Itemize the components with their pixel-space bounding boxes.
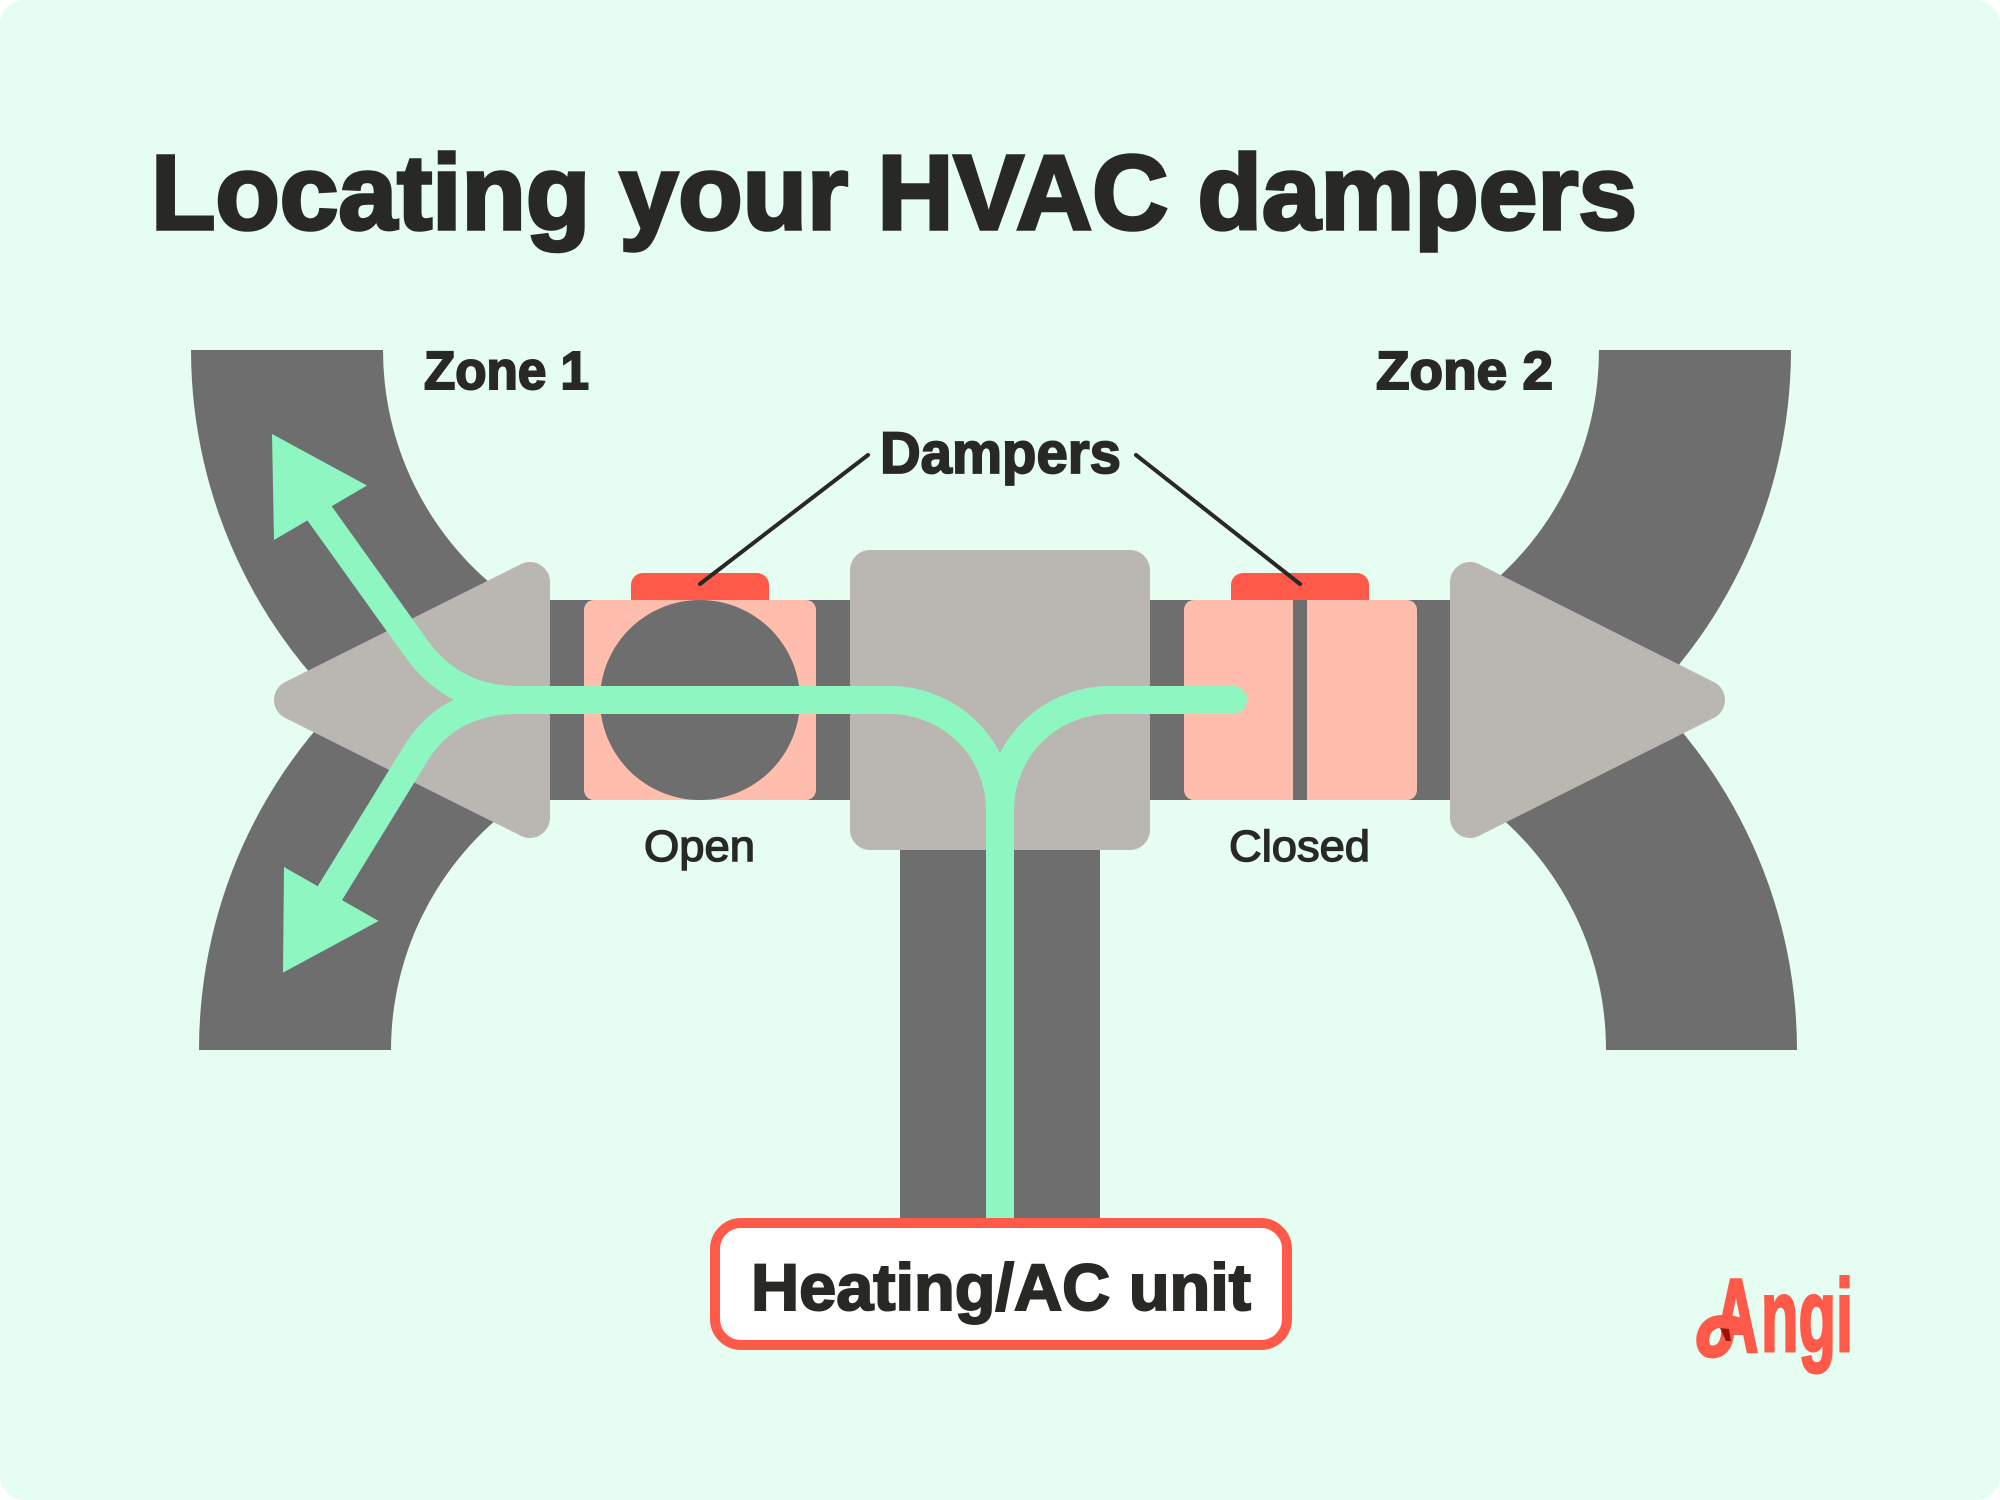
Angi logo <box>1696 1275 1850 1374</box>
duct: zone 1 upper branch <box>191 350 501 743</box>
damper body: open <box>584 600 816 800</box>
logo letters ngi: ngi <box>1761 1258 1853 1373</box>
junction: left splitter <box>294 582 530 818</box>
closed label: Closed <box>1229 822 1370 871</box>
damper handle: closed <box>1231 573 1369 600</box>
zone 2 label: Zone 2 <box>1376 341 1553 401</box>
damper blade: open <box>600 600 800 800</box>
unit label: Heating/AC unit <box>751 1250 1251 1324</box>
dampers label: Dampers <box>880 421 1121 486</box>
airflow: upper stem <box>310 500 518 700</box>
heating and AC unit box <box>715 1223 1287 1345</box>
closed damper <box>1184 573 1417 800</box>
damper handle: open <box>631 573 769 600</box>
open damper <box>584 573 816 800</box>
arrowhead: lower <box>283 867 379 973</box>
duct: horizontal main <box>540 600 1460 800</box>
damper body: closed <box>1184 600 1417 800</box>
airflow: supply to left branch <box>518 700 1000 1225</box>
airflow arrows <box>272 434 1233 1225</box>
unit box outline <box>715 1223 1287 1345</box>
duct: zone 2 upper branch <box>1481 350 1791 743</box>
airflow: lower stem <box>322 700 518 906</box>
open label: Open <box>644 822 755 871</box>
title: Locating your HVAC dampers <box>151 134 1637 252</box>
logo overlap shade <box>1720 1328 1731 1341</box>
arrowhead: upper <box>272 434 367 540</box>
airflow: supply to closed damper <box>1000 700 1233 810</box>
duct: zone 2 lower branch <box>1488 657 1797 1050</box>
junction: central box <box>850 550 1150 850</box>
junction: right splitter <box>1470 582 1705 818</box>
logo swash <box>1703 1320 1745 1352</box>
leader line: right damper <box>1136 455 1300 584</box>
duct: vertical supply <box>900 840 1100 1230</box>
damper blade: closed <box>1293 600 1307 800</box>
duct: zone 1 lower branch <box>199 658 508 1050</box>
leader line: left damper <box>700 455 868 584</box>
zone 1 label: Zone 1 <box>424 341 589 401</box>
logo letter A: A <box>1714 1258 1758 1373</box>
